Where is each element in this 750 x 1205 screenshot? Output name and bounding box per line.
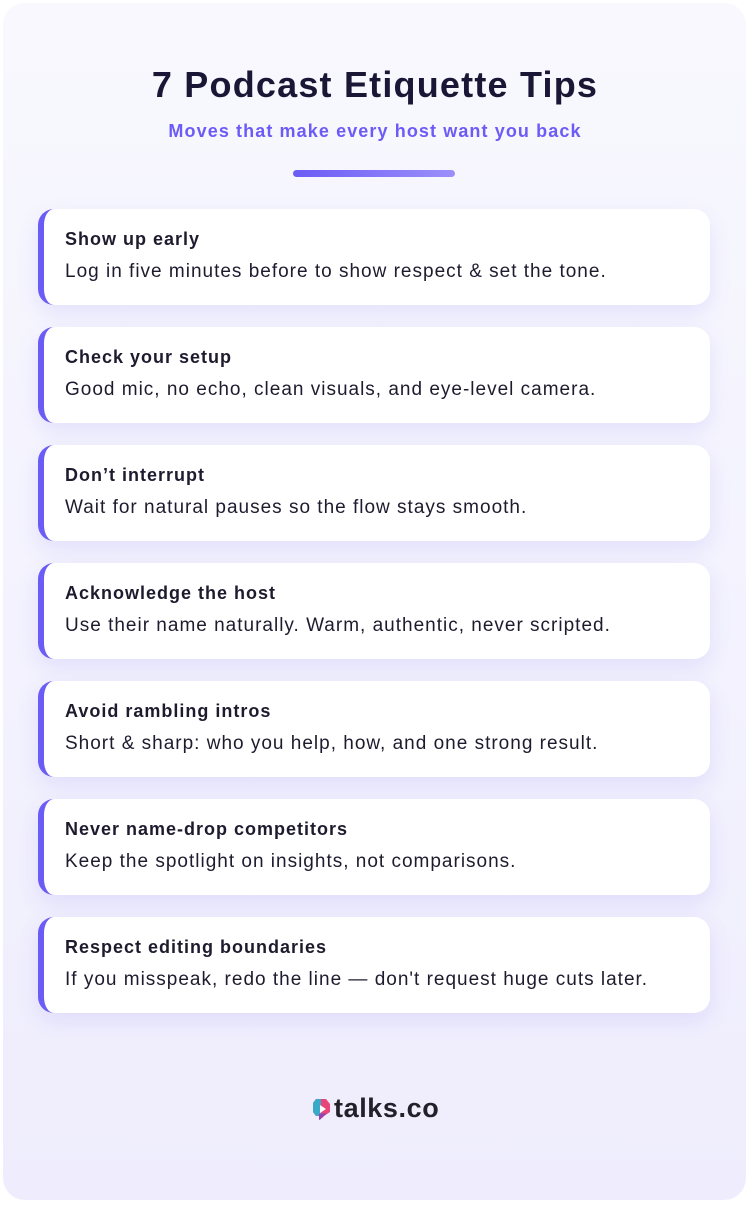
card: respect editing boundaries: If you misspeak, redo the line — don't request huge cuts later. bbox=[65, 969, 648, 990]
card: avoid rambling intros: Avoid rambling intros bbox=[65, 701, 271, 721]
card: avoid rambling intros bbox=[38, 681, 710, 777]
card: don't interrupt: Wait for natural pauses so the flow stays smooth. bbox=[65, 497, 527, 518]
card: acknowledge the host bbox=[38, 563, 710, 659]
card: check your setup bbox=[38, 327, 710, 423]
accent bar bbox=[293, 170, 455, 177]
card: show up early: Show up early bbox=[65, 229, 200, 249]
card: don't interrupt bbox=[38, 445, 710, 541]
card: never name-drop competitors: Keep the spotlight on insights, not comparisons. bbox=[65, 851, 516, 872]
card: respect editing boundaries bbox=[38, 917, 710, 1013]
logo: talks.co: talks.co bbox=[334, 1093, 439, 1123]
card: never name-drop competitors: Never name-drop competitors bbox=[65, 819, 348, 839]
card: avoid rambling intros: Short & sharp: who you help, how, and one strong result. bbox=[65, 733, 598, 754]
card: check your setup: Check your setup bbox=[65, 347, 232, 367]
card: show up early bbox=[38, 209, 710, 305]
card: show up early: Log in five minutes before to show respect & set the tone. bbox=[65, 261, 607, 282]
card: respect editing boundaries: Respect editing boundaries bbox=[65, 937, 327, 957]
card: check your setup: Good mic, no echo, clean visuals, and eye-level camera. bbox=[65, 379, 596, 400]
card: acknowledge the host: Use their name naturally. Warm, authentic, never scripted. bbox=[65, 615, 611, 636]
title: 7 Podcast Etiquette Tips bbox=[152, 64, 598, 105]
card: acknowledge the host: Acknowledge the host bbox=[65, 583, 276, 603]
card: don't interrupt: Don’t interrupt bbox=[65, 465, 205, 485]
subtitle: Moves that make every host want you back bbox=[168, 121, 582, 141]
card: never name-drop competitors bbox=[38, 799, 710, 895]
